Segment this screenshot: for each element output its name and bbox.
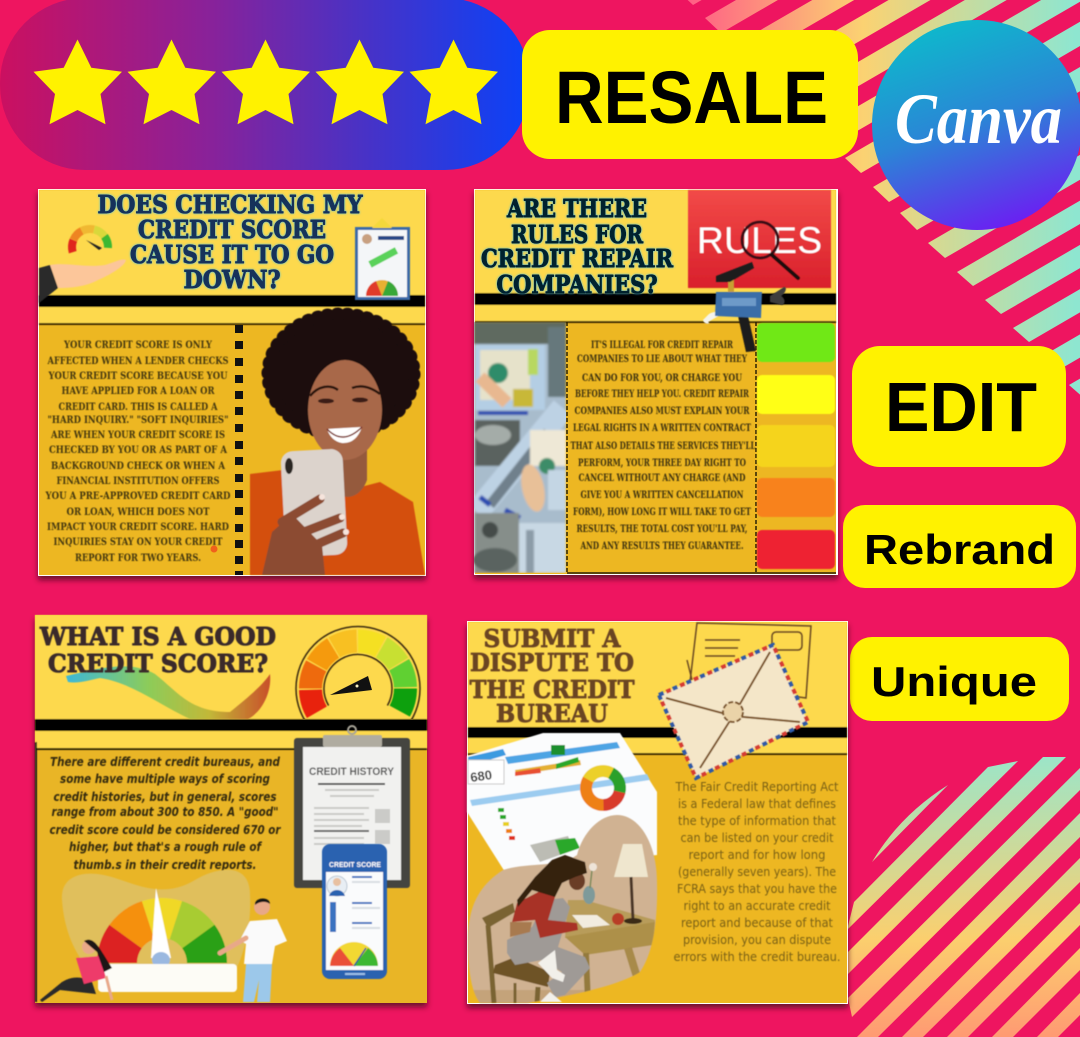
panel 1 body text: HAVE APPLIED FOR A LOAN OR [62, 386, 215, 397]
panel 1 body text: INQUIRIES STAY ON YOUR CREDIT [54, 537, 223, 548]
panel 1 body text: REPORT FOR TWO YEARS. [75, 553, 201, 564]
panel 2 background [474, 189, 838, 575]
icon: postcard outline [687, 623, 811, 698]
panel 3 body text: range from about 300 to 850. A "good" [52, 804, 278, 819]
face [569, 872, 585, 890]
chart: credit score gauge [294, 624, 422, 719]
panel 4 body text: is a Federal law that defines [678, 796, 836, 811]
sock and shoe [538, 950, 565, 982]
panel 2 body text: CAN DO FOR YOU, OR CHARGE YOU [582, 373, 742, 384]
sweater [512, 887, 578, 938]
panel 2 body text [570, 340, 756, 552]
long hair [517, 855, 587, 907]
background: top right diagonal stripes [677, 0, 1080, 399]
panel 2 header band [475, 190, 836, 323]
panel 4 body text: FCRA says that you have the [677, 881, 837, 896]
photo: smiling woman with phone [250, 314, 425, 575]
orange dot [210, 546, 218, 552]
panel 4 title [470, 624, 634, 728]
panel: submit a dispute [467, 621, 848, 1005]
panel 3 body text [50, 754, 281, 872]
panel 2 body text: THAT ALSO DETAILS THE SERVICES THEY'LL [570, 441, 756, 452]
panel 4 body text [674, 779, 840, 964]
panel 1 background [38, 189, 426, 576]
panel 2 body text: AND ANY RESULTS THEY GUARANTEE. [580, 541, 744, 552]
panel 3 body text: credit score could be considered 670 or [50, 822, 281, 837]
panel 1 body text: YOU A PRE-APPROVED CREDIT CARD [45, 491, 231, 502]
icon: clipboard report [355, 218, 410, 300]
icon: phone with credit score [322, 844, 387, 979]
panel 3 title [39, 622, 276, 678]
panel: does checking my credit score [38, 189, 426, 576]
panel 2 body text: PERFORM, YOUR THREE DAY RIGHT TO [578, 458, 746, 469]
panel 2 body text: COMPANIES ALSO MUST EXPLAIN YOUR [574, 406, 750, 417]
panel 4 body text: (generally seven years). The [678, 864, 836, 879]
panel 2 body text: CANCEL WITHOUT ANY CHARGE (AND [578, 473, 746, 484]
panel 2 title: COMPANIES? [496, 270, 658, 299]
panel 4 title: SUBMIT A [484, 624, 621, 653]
icon: credit history clipboard [294, 726, 410, 888]
RESALE badge [522, 30, 858, 159]
panel 1 title: CAUSE IT TO GO [130, 240, 334, 269]
Rebrand badge: Rebrand [864, 526, 1055, 573]
panel 1 body text: AFFECTED WHEN A LENDER CHECKS [47, 356, 228, 367]
icon: phone with credit score: CREDIT SCORE [329, 860, 381, 869]
panel 4 title: DISPUTE TO [470, 648, 634, 677]
panel 4 body text: the type of information that [678, 813, 836, 828]
icon: hand holding gauge [39, 222, 126, 303]
panel 3 header band [35, 615, 427, 1002]
panel 1 body text: YOUR CREDIT SCORE BECAUSE YOU [48, 371, 228, 382]
image: red rules board with magnifier: RULES [697, 220, 822, 261]
panel 3 body text: thumb.s in their credit reports. [74, 857, 256, 872]
Canva logo circle [872, 20, 1080, 230]
illustration: gauge with two people [40, 870, 287, 1026]
panel 1 title: DOES CHECKING MY [98, 190, 363, 219]
panel 1 body text: ARE WHEN YOUR CREDIT SCORE IS [50, 430, 225, 441]
panel 3 background [35, 615, 427, 1003]
panel 3 body text: some have multiple ways of scoring [60, 771, 270, 786]
panel 2 body text: IT'S ILLEGAL FOR CREDIT REPAIR [591, 340, 733, 351]
panel 1 body text [45, 340, 231, 564]
dashed dividers [567, 322, 756, 573]
RESALE badge: RESALE [555, 56, 828, 139]
panel 4 header band [468, 622, 847, 755]
panel 3 title: WHAT IS A GOOD [39, 622, 276, 651]
lamp [614, 844, 648, 877]
panel 1 title [98, 190, 363, 294]
panel 4 body text: report and for how long [688, 847, 826, 862]
panel 4 title: BUREAU [496, 699, 608, 728]
panel 3 body text: There are different credit bureaus, and [50, 754, 281, 769]
panel 1 header band [39, 190, 425, 325]
illustration: woman writing at desk [468, 815, 658, 1005]
star rating [34, 40, 498, 124]
icon: hammer, wrench and credit card [703, 262, 786, 352]
panel 1 body text: BACKGROUND CHECK OR WHEN A [51, 461, 225, 472]
panel 2 body text: COMPANIES TO LIE ABOUT WHAT THEY [577, 354, 748, 365]
panel 4 body text: report and because of that [681, 915, 833, 930]
panel 1 title: CREDIT SCORE [138, 215, 326, 244]
panel: what is a good credit score [35, 615, 427, 1026]
panel 3 title: CREDIT SCORE? [48, 649, 268, 678]
panel 2 title: RULES FOR [511, 220, 644, 249]
panel 1 body text: OR LOAN, WHICH DOES NOT [66, 507, 210, 518]
panel 4 body text: can be listed on your credit [680, 830, 834, 845]
panel 1 body text: CHECKED BY YOU OR AS PART OF A [49, 445, 227, 456]
chair [488, 925, 494, 1003]
Unique badge [850, 637, 1069, 721]
panel 2 body text: BEFORE THEY HELP YOU. CREDIT REPAIR [575, 389, 749, 400]
panel 4 body text: provision, you can dispute [683, 932, 831, 947]
panel 4 title: THE CREDIT [470, 675, 634, 704]
panel 1 body text: IMPACT YOUR CREDIT SCORE. HARD [47, 522, 229, 533]
panel 1 body text: "HARD INQUIRY." "SOFT INQUIRIES" [48, 415, 228, 426]
colour swatch column [757, 323, 835, 569]
panel 1 body text: FINANCIAL INSTITUTION OFFERS [56, 476, 220, 487]
panel 4 background [467, 621, 848, 1004]
panel 4 body text: errors with the credit bureau. [674, 949, 840, 964]
image: red rules board with magnifier [688, 190, 831, 288]
overalls [507, 898, 590, 997]
panel 2 title: ARE THERE [506, 194, 647, 223]
rating pill with five stars [0, 0, 530, 170]
panel 3 body text: higher, but that's a rough rule of [69, 839, 262, 854]
Unique badge: Unique [871, 658, 1037, 705]
EDIT badge: EDIT [885, 368, 1037, 446]
square dotted divider [235, 325, 243, 575]
mug [612, 913, 624, 925]
panel 4 body text: right to an accurate credit [684, 898, 831, 913]
vase and flowers [583, 886, 595, 904]
image: credit report sheet: 680 [469, 767, 493, 785]
panel 2 body text: GIVE YOU A WRITTEN CANCELLATION [580, 490, 744, 501]
desk [565, 900, 655, 938]
panel 2 title: CREDIT REPAIR [481, 244, 674, 273]
icon: airmail envelope [659, 645, 808, 778]
icon: credit history clipboard: CREDIT HISTORY [309, 766, 395, 778]
image: pile of dollar bills [473, 322, 566, 573]
panel 3 body text: credit histories, but in general, scores [54, 789, 276, 804]
panel 2 body text: LEGAL RIGHTS IN A WRITTEN CONTRACT [573, 423, 751, 434]
panel: rules for credit repair companies [473, 189, 838, 575]
panel 1 body text: YOUR CREDIT SCORE IS ONLY [63, 340, 213, 351]
background: bottom right diagonal stripes [845, 757, 1080, 1037]
image: credit report sheet [467, 733, 657, 872]
panel 4 body text: The Fair Credit Reporting Act [675, 779, 839, 794]
panel 2 body text: FORM), HOW LONG IT WILL TAKE TO GET [573, 507, 751, 518]
panel 1 title: DOWN? [184, 265, 280, 294]
colour brush stroke [66, 666, 270, 719]
Rebrand badge [843, 505, 1076, 588]
panel 1 body text: CREDIT CARD. THIS IS CALLED A [58, 402, 218, 413]
EDIT badge [852, 346, 1066, 467]
panel 2 title [481, 194, 674, 299]
panel 2 body text: RESULTS, THE TOTAL COST YOU'LL PAY, [576, 524, 748, 535]
